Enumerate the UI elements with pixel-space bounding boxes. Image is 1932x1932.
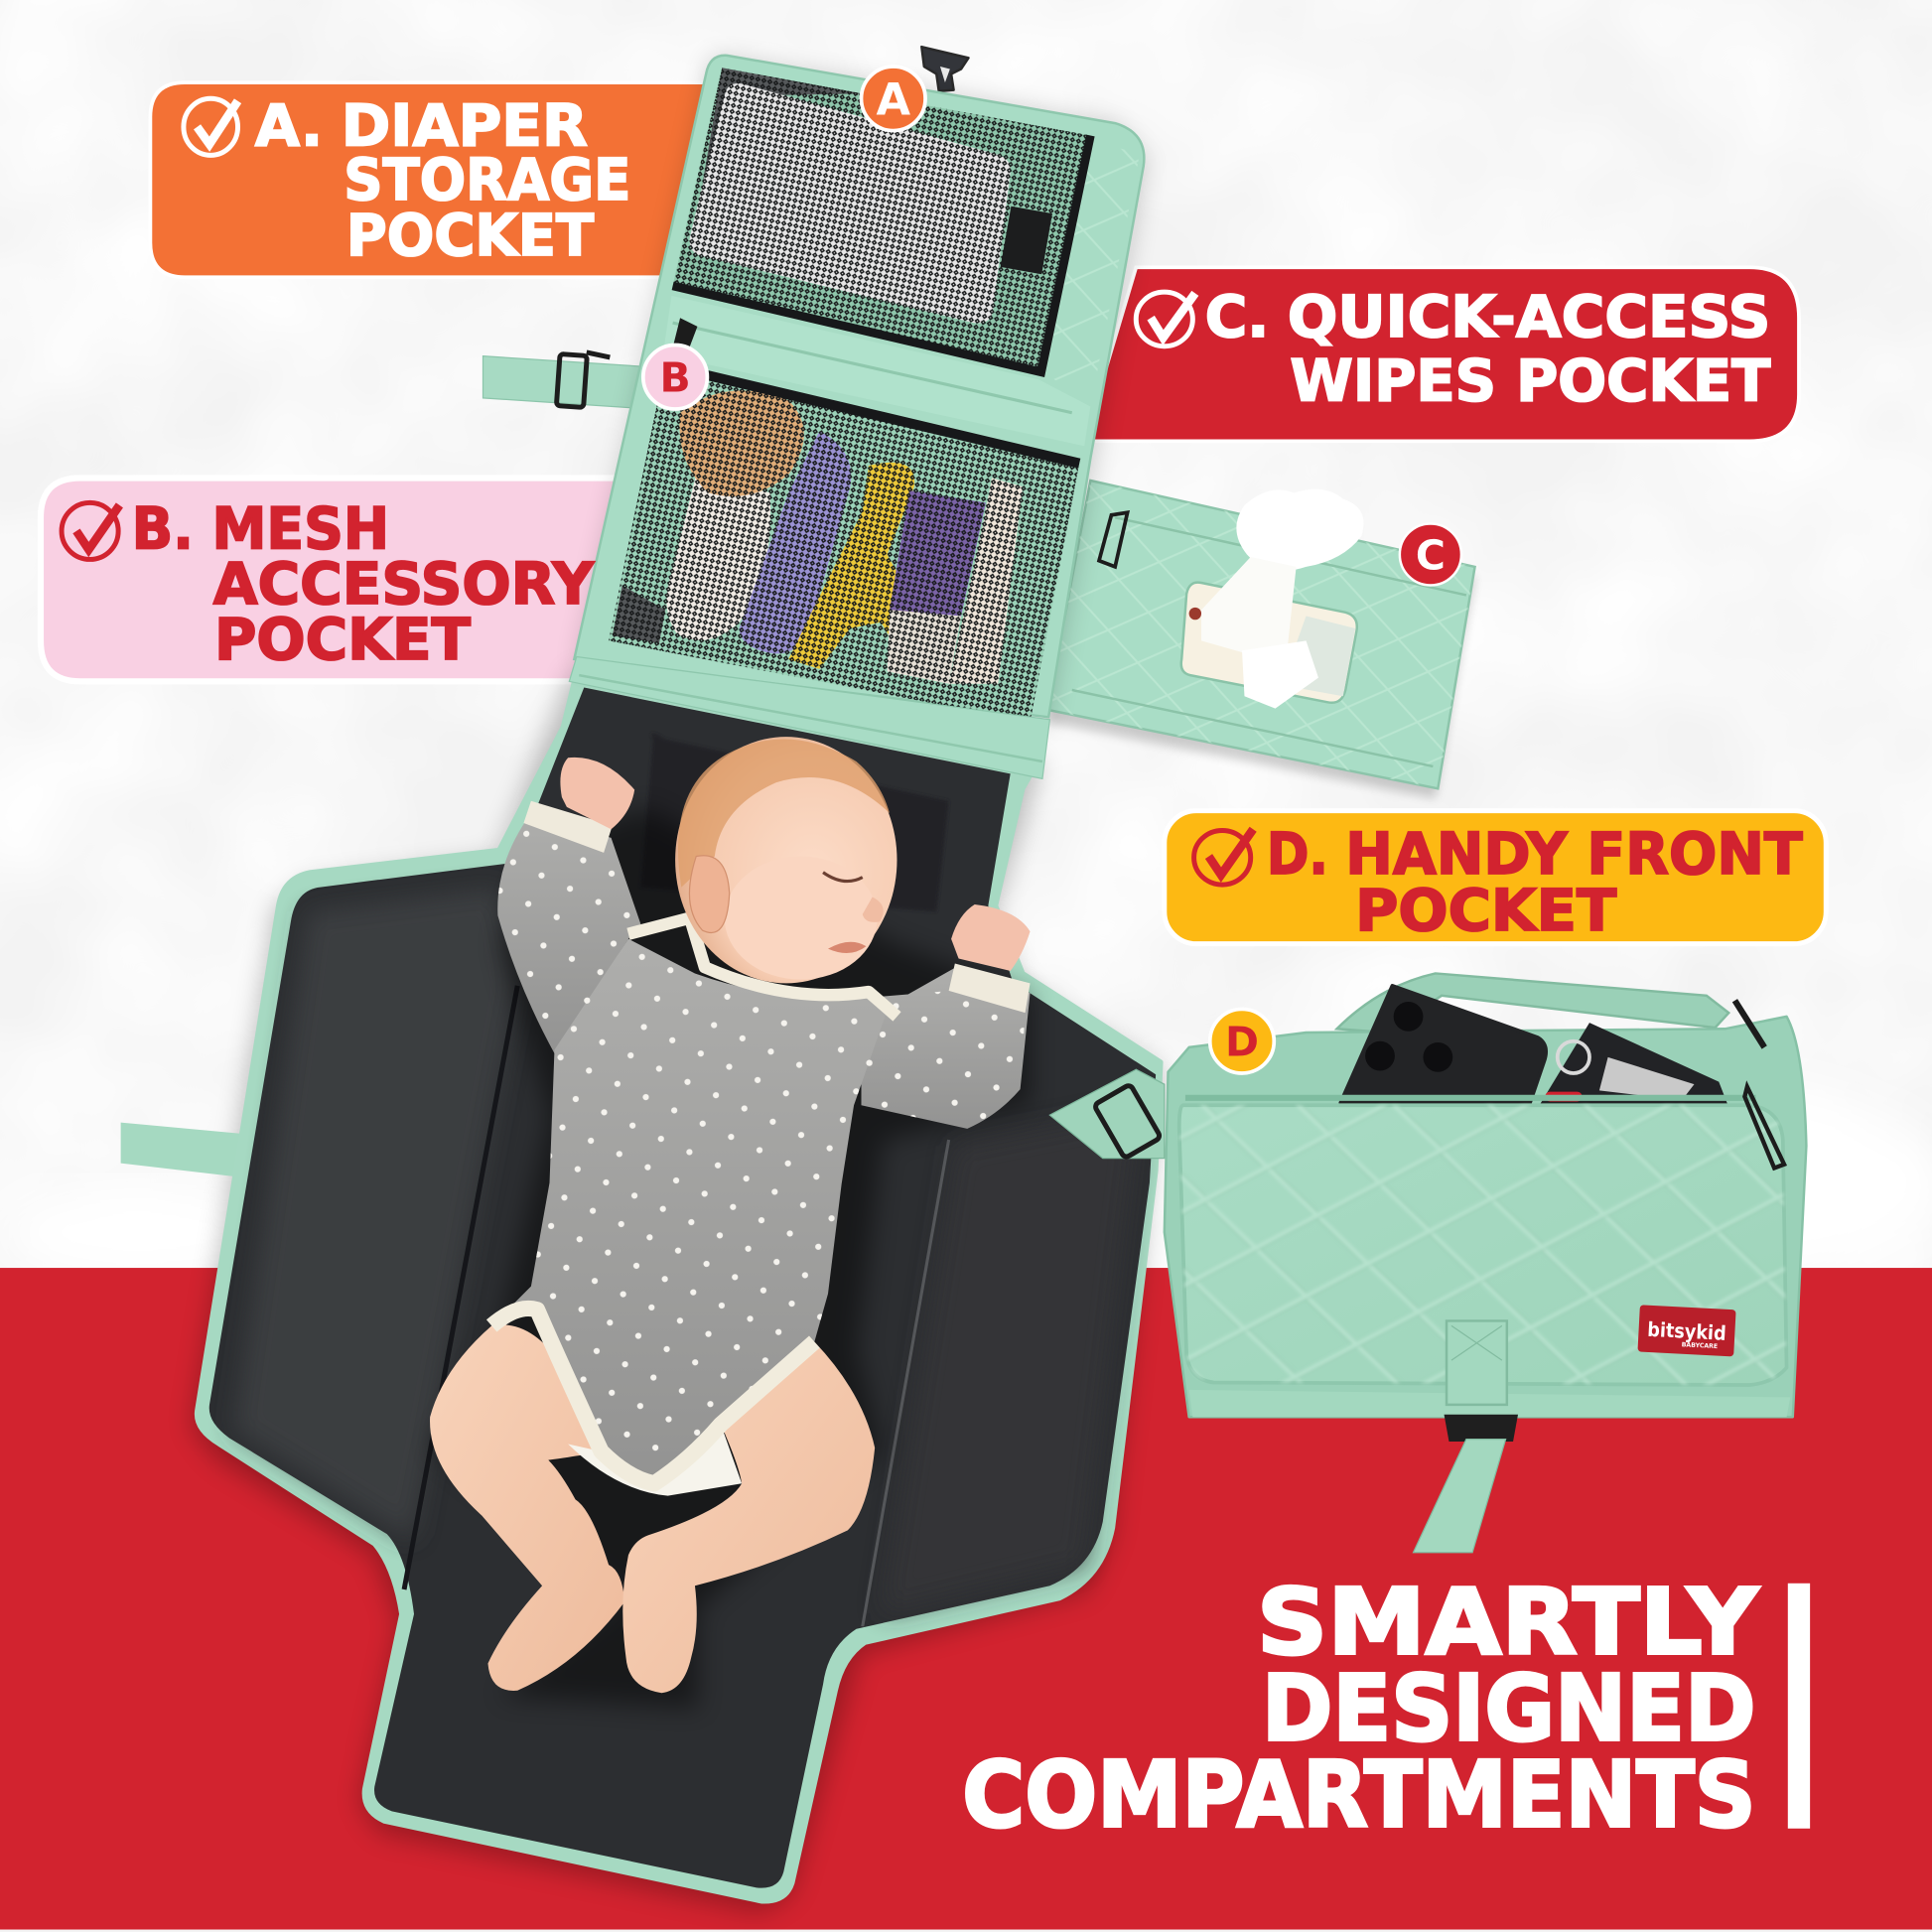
diaper (568, 1425, 742, 1496)
title: smartly designed compartments (962, 1570, 1760, 1848)
front pocket (1179, 1105, 1787, 1385)
left fist (560, 758, 634, 829)
toy: plush bunny (666, 475, 770, 640)
head (675, 737, 897, 983)
pad shadow (191, 669, 1162, 1913)
title: smartly designed compartments: COMPARTMENTS (962, 1741, 1756, 1848)
text B: ACCESSORY (213, 550, 595, 618)
ear (689, 856, 730, 932)
pad left panel sheen (234, 888, 517, 1540)
bag: closed front pocket (1049, 973, 1806, 1553)
baby shadow (433, 808, 1031, 1708)
badge C: C (1416, 531, 1446, 579)
text D: D. (1267, 820, 1328, 888)
check icon C (1136, 292, 1195, 346)
text A: DIAPER (342, 91, 588, 159)
callout A: diaper storage pocket (184, 91, 630, 269)
brand label (1637, 1305, 1736, 1356)
text B: MESH (211, 494, 389, 562)
wipes lid (1236, 489, 1363, 571)
side clip (1744, 1087, 1784, 1169)
toy: purple plush (740, 431, 851, 654)
badge D (1210, 1009, 1274, 1073)
zipper strip (663, 296, 1090, 446)
label shape B (41, 479, 640, 681)
eye (823, 873, 863, 882)
text B (132, 494, 595, 673)
brand label: bitsykid (1647, 1318, 1726, 1345)
cheek (725, 857, 878, 980)
nose (863, 897, 884, 922)
text B: B. (132, 494, 194, 562)
right fist (951, 904, 1031, 971)
lower binding (1189, 1390, 1790, 1417)
pad right panel sheen (881, 1109, 1140, 1614)
toy: purple box (890, 490, 986, 617)
toy: tubes (888, 610, 961, 684)
bodysuit (491, 939, 888, 1483)
label shape A (150, 82, 705, 277)
bodysuit dots (491, 939, 888, 1483)
pad seams (404, 986, 517, 1589)
diapers pack (690, 83, 1011, 324)
brand label: BABYCARE (1682, 1341, 1718, 1350)
left sleeve (497, 813, 640, 1053)
mouth (828, 942, 866, 953)
changing pad (121, 661, 1162, 1913)
left leg (430, 1324, 624, 1691)
text C: C. (1205, 283, 1269, 350)
left strap with buckle (483, 352, 653, 409)
right sleeve (862, 968, 1031, 1129)
wipes panel body (1047, 481, 1475, 788)
badge D: D (1225, 1019, 1259, 1066)
text A: POCKET (346, 202, 594, 269)
text D: POCKET (1355, 877, 1616, 944)
panel mint (574, 56, 1144, 717)
badge B: B (660, 354, 691, 402)
callout C: quick-access wipes pocket (1136, 283, 1771, 414)
callout B: mesh accessory pocket (62, 494, 595, 673)
phone (1340, 986, 1546, 1109)
check icon B (62, 502, 119, 559)
bag handle (1337, 973, 1728, 1033)
diaper mesh pocket (673, 68, 1090, 372)
badge C (1400, 523, 1461, 586)
pad left tab (121, 1123, 240, 1176)
baby (430, 737, 1031, 1708)
pad dark surface (209, 688, 1156, 1888)
lower binding strip (569, 656, 1049, 778)
text B: POCKET (214, 606, 471, 673)
zipper pull (1099, 512, 1128, 567)
wipes window (1181, 583, 1357, 703)
title: smartly designed compartments: SMARTLY (1257, 1570, 1760, 1676)
badge A: A (876, 73, 910, 125)
wipes panel shadow (1047, 490, 1475, 798)
badge B (643, 345, 707, 409)
check icon D (1194, 829, 1253, 885)
badge A (862, 67, 925, 131)
right leg (622, 1342, 875, 1693)
hair (678, 739, 890, 888)
callout D: handy front pocket (1165, 811, 1826, 944)
pad mint outline (197, 661, 1161, 1901)
text A (255, 91, 630, 269)
label shape C (1084, 267, 1799, 441)
bodysuit trim (491, 1309, 814, 1483)
bag left strap (1049, 1069, 1165, 1159)
check icon A (184, 98, 238, 155)
car keys (1540, 1023, 1727, 1104)
text D (1267, 820, 1803, 944)
title accent bar (1788, 1584, 1810, 1829)
red lower band (0, 1268, 1932, 1930)
text A: A. (255, 91, 323, 159)
text C (1205, 283, 1771, 414)
bag top (1165, 1017, 1806, 1417)
front strap (1414, 1320, 1518, 1553)
organizer upper panel (569, 56, 1146, 778)
text D: HANDY FRONT (1345, 820, 1803, 888)
panel shadow (577, 56, 1146, 727)
text C: WIPES POCKET (1290, 346, 1771, 414)
toy: giraffe (788, 463, 930, 669)
wipes pocket panel (1047, 481, 1475, 798)
label shape D (1165, 811, 1826, 944)
text C: QUICK-ACCESS (1288, 283, 1770, 350)
top buckle (921, 47, 968, 91)
mesh accessory pocket (609, 363, 1079, 722)
title: smartly designed compartments: DESIGNED (1262, 1655, 1756, 1761)
text A: STORAGE (344, 146, 630, 213)
